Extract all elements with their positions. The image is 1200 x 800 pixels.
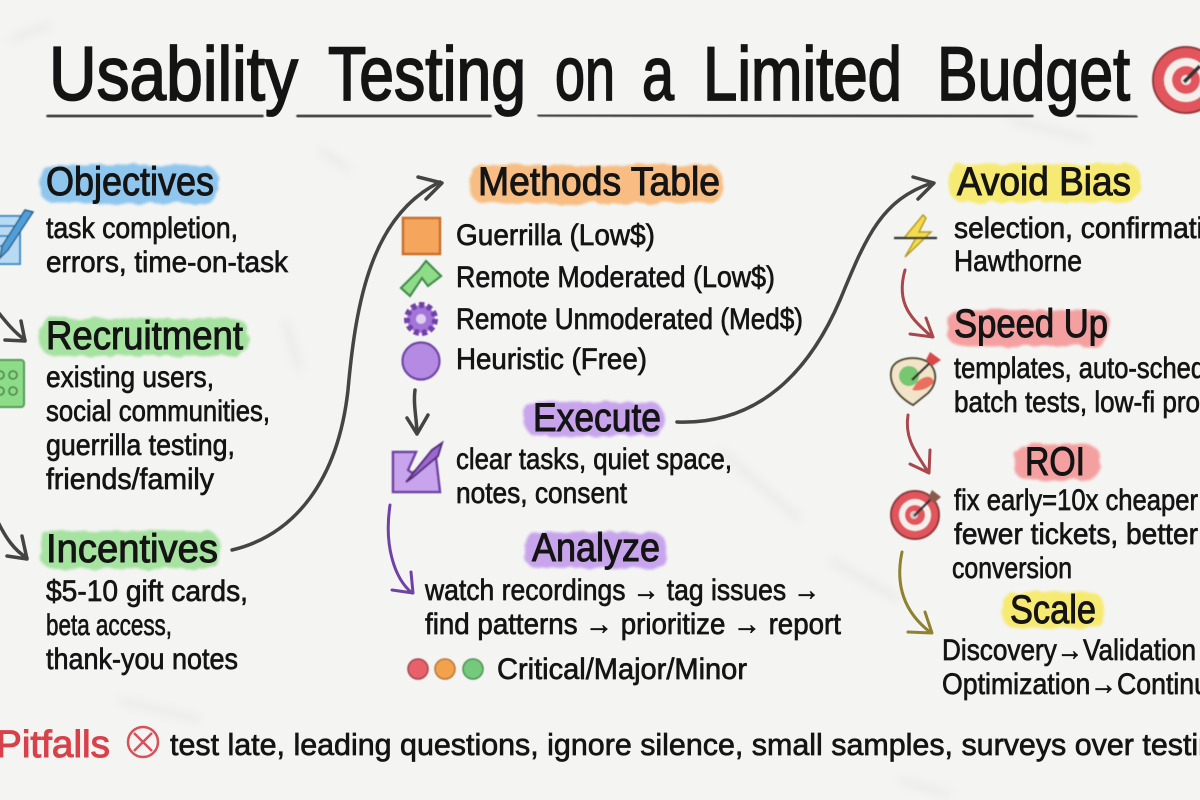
panel: execute	[393, 396, 732, 510]
title: Testing	[328, 32, 526, 117]
icon: clipboard and pen	[0, 210, 33, 264]
heading: objectives: Objectives	[46, 160, 214, 204]
icon: green arrow shape	[401, 261, 441, 296]
arrow: roi to scale	[900, 552, 932, 633]
text: incentives: beta access,	[46, 609, 172, 642]
text: guerrilla: Guerrilla (Low$)	[456, 219, 655, 252]
title: Usability	[49, 32, 298, 117]
text: roi	[952, 484, 1198, 585]
icon: orange square	[403, 218, 440, 254]
text: remote moderated: Remote Moderated (Low$)	[456, 261, 775, 294]
text: analyze: watch recordings → tag issues →	[424, 574, 820, 607]
text: objectives: errors, time-on-task	[46, 246, 289, 279]
arrow: recruitment to incentives	[0, 522, 27, 559]
icon: purple circle	[402, 342, 440, 380]
title: on	[555, 32, 615, 117]
icon: green dot card	[0, 360, 24, 407]
arrow: execute to analyze	[388, 505, 413, 593]
panel: scale	[942, 588, 1200, 701]
title: Budget	[937, 32, 1130, 117]
arrow: objectives to recruitment	[0, 312, 25, 341]
text: recruitment: friends/family	[46, 463, 214, 496]
text: roi: conversion	[952, 552, 1072, 585]
icon: roi target	[891, 490, 941, 539]
panel: analyze	[408, 526, 842, 686]
icon: lightning bolt	[894, 215, 937, 257]
text: incentives: thank-you notes	[46, 643, 238, 676]
panel: avoid bias	[894, 160, 1200, 278]
arrow: speed up to roi	[907, 415, 930, 473]
heading: methods table: Methods Table	[478, 160, 720, 204]
panel: methods table	[401, 160, 803, 380]
title: a	[642, 32, 675, 117]
heading: execute: Execute	[533, 396, 661, 440]
title: Limited	[703, 32, 902, 117]
heading: roi: ROI	[1025, 440, 1085, 484]
heading: avoid bias: Avoid Bias	[957, 160, 1131, 204]
title	[48, 32, 1136, 117]
text: heuristic: Heuristic (Free)	[456, 343, 647, 376]
icon: purple gear	[407, 305, 435, 333]
arrow: execute to avoid bias	[677, 177, 934, 422]
text: analyze: find patterns → prioritize → report	[425, 608, 842, 641]
text: objectives	[46, 212, 289, 279]
severity dots	[408, 659, 483, 679]
text: recruitment	[46, 361, 270, 496]
text: incentives: $5-10 gift cards,	[46, 575, 248, 608]
text: speed up	[954, 352, 1200, 419]
text: objectives: task completion,	[46, 212, 238, 245]
text: execute	[456, 443, 732, 510]
text: scale	[942, 634, 1200, 701]
heading: scale: Scale	[1010, 588, 1096, 632]
text: recruitment: guerrilla testing,	[46, 429, 235, 462]
arrow: methods to execute	[407, 390, 428, 434]
text: execute: notes, consent	[456, 477, 628, 510]
text: recruitment: existing users,	[46, 361, 214, 394]
text: avoid bias: Hawthorne	[954, 245, 1082, 278]
text: severity legend: Critical/Major/Minor	[497, 653, 747, 686]
panel: incentives	[40, 527, 248, 676]
heading: recruitment: Recruitment	[46, 314, 243, 358]
text: analyze	[424, 574, 842, 641]
heading: analyze: Analyze	[532, 526, 660, 570]
text: incentives	[46, 575, 248, 676]
panel: objectives	[0, 160, 289, 279]
icon: square and pencil	[393, 443, 442, 492]
text: avoid bias	[954, 212, 1200, 278]
text: recruitment: social communities,	[46, 395, 270, 428]
arrow: incentives to methods table	[232, 177, 442, 550]
panel: recruitment	[0, 314, 270, 496]
text: execute: clear tasks, quiet space,	[456, 443, 732, 476]
panel: pitfalls	[0, 724, 1200, 766]
arrow: avoid bias to speed up	[902, 270, 933, 337]
panel: roi	[891, 440, 1198, 585]
icon: heart target	[891, 352, 941, 405]
panel: speed up	[891, 302, 1200, 419]
text: remote unmoderated: Remote Unmoderated (Med$)	[456, 303, 803, 336]
icon: cross circle	[128, 727, 158, 757]
heading: incentives: Incentives	[46, 527, 218, 571]
icon: title target	[1153, 47, 1200, 113]
heading: speed up: Speed Up	[954, 302, 1108, 346]
